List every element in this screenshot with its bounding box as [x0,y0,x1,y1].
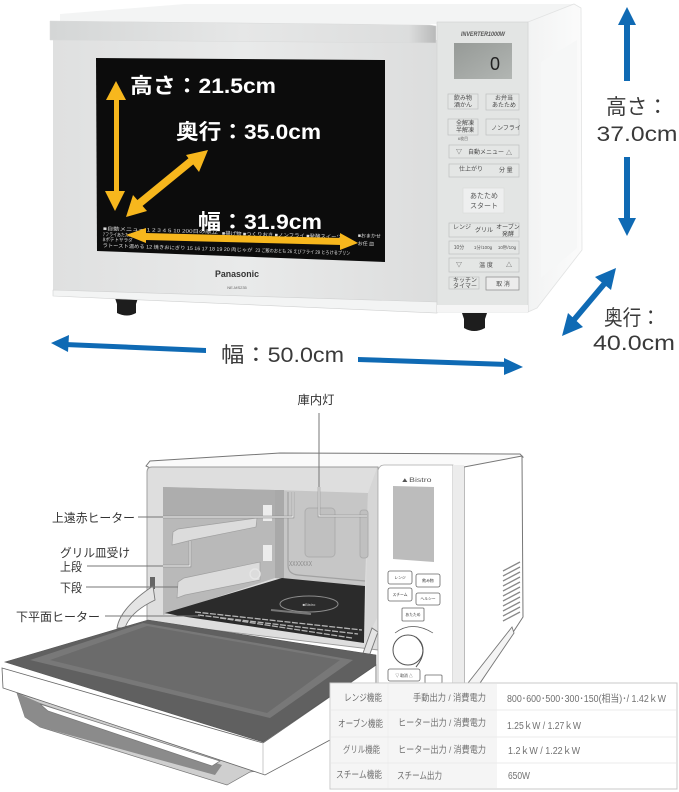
blue arrow: exterior width left [51,335,206,353]
oven floor heater [165,578,365,643]
display [393,486,434,562]
callout: grill pan rails: 上段 [60,559,82,574]
frame left notch [150,577,155,589]
interior lamp panel [289,508,368,568]
row: microwave [344,692,666,705]
yellow arrow: interior width [126,228,358,250]
microwave photo [50,4,582,331]
row: steam: スチーム機能 [336,769,382,781]
window menu text [102,224,381,258]
panel buttons: あたため [492,102,516,109]
window menu text: ラトースト温める 12 焼きおにぎり 15 16 17 18 19 20 肉じゃが [102,242,253,254]
microwave door [53,38,437,303]
yellow arrow: interior depth [126,150,208,217]
oven front frame [147,467,378,650]
panel buttons: 飲み物 [454,94,472,102]
panel buttons: スタート [470,201,498,210]
dial [393,626,433,667]
panel buttons: 半解凍 [456,126,474,134]
yellow arrow: interior height [105,81,126,211]
window menu text: 23 ご飯のおとも 26 えびフライ 29 とろけるプリン [255,247,350,257]
cavity left wall [163,487,275,615]
panel buttons: ノンフライ [491,125,521,132]
callout: grill pan rails [60,541,190,595]
blue arrow: exterior height up [618,7,636,81]
row: grill: グリル機能 [343,744,380,756]
LCD display: 0 [490,54,500,74]
panel buttons: タイマー [453,282,477,290]
buttons [388,571,442,683]
microwave feet [115,298,487,331]
callout: grill pan rails: 下段 [60,580,82,595]
panel buttons [448,94,521,290]
panel buttons: △ [506,261,512,269]
panel buttons: あたため [470,192,498,200]
panel buttons: オーブン [496,223,520,231]
door underside [17,693,263,785]
oven control panel: ▽ 取消 △ [395,673,413,678]
door inner rim [5,620,376,742]
side vents [503,562,520,621]
oven control panel: ヘルシー [420,597,436,601]
label: exterior depth [593,307,675,355]
panel buttons: 取 消 [496,280,510,288]
panel buttons: 酒かん [454,101,472,109]
door white front [2,665,376,775]
window menu text: ■おまかせ [358,232,381,240]
row: grill [343,744,580,757]
LCD display [454,43,512,79]
row: microwave: レンジ機能 [344,692,382,704]
row: microwave: 手動出力 / 消費電力 [413,692,486,704]
label: interior depth: 奥行：35.0cm [176,121,321,144]
panel buttons: 6枚目 [458,135,468,141]
open oven illustration [2,453,523,785]
interior lamp panel: XXXXXXX [289,561,312,568]
panel buttons: お弁当 [495,94,513,102]
cavity back wall [275,490,368,586]
door arms [117,586,514,683]
row: oven: オーブン機能 [338,718,383,730]
oven control panel: あたため [405,612,421,617]
label: exterior height [596,96,678,146]
panel buttons: グリル [475,226,493,234]
panel buttons: ▽ [456,262,462,269]
callout: upper heater [52,492,293,525]
panel buttons: 10分 [454,244,464,251]
panel buttons: 仕上がり [459,165,483,173]
label: interior height: 高さ：21.5cm [130,75,276,98]
row: oven: 1.25ｋW / 1.27ｋW [507,720,581,732]
blue arrow: exterior height down [618,157,636,236]
row: steam [336,769,530,782]
label: interior width: 幅：31.9cm [198,211,322,234]
cavity right wall [365,468,377,642]
panel buttons: 10秒/10g [498,244,517,251]
oven control panel: 飲み物 [422,578,434,583]
door inner surface [50,626,340,713]
callout: grill pan rails: グリル皿受け [60,546,130,560]
row: steam: 650W [508,771,530,782]
panel buttons: △ [506,149,512,157]
microwave side panel [528,4,582,312]
panel buttons: 分 量 [499,166,513,174]
panel buttons: レンジ [453,225,471,231]
racks [172,505,272,598]
window menu text: お任 皿 [358,240,374,248]
row: grill: 1.2ｋW / 1.22ｋW [508,745,580,757]
control panel [437,22,528,312]
oven control panel: レンジ [394,575,406,580]
panel buttons: 自動メニュー [468,148,504,156]
window menu text: 7フライあたため [103,232,133,239]
oven body top [146,453,523,468]
row: steam: スチーム出力 [397,770,442,782]
specification table [330,683,677,789]
oven control panel [378,465,464,683]
callout: interior light: 庫内灯 [298,393,334,407]
bistro logo: ▲Bistro [400,477,432,484]
brand logo: Panasonic [215,269,259,280]
door window [96,58,385,262]
window menu text: ■自動メニュー 1 2 3 4 5 10 200日の献立 [103,225,218,236]
label: exterior depth: 奥行： [604,307,660,330]
panel buttons: 1分/100g [474,244,493,251]
panel buttons: 温 度 [479,261,493,269]
label: exterior depth: 40.0cm [593,332,675,355]
callout: interior light [298,393,367,516]
door top band [50,21,436,43]
window menu text: ■揚げ物 ■つくりおき ■ノンフライ ■発酵スイーツ [222,230,342,241]
blue arrow: exterior depth [562,268,616,336]
panel buttons: 全解凍 [456,119,474,127]
microwave top surface [60,4,575,24]
callout: lower heater: 下平面ヒーター [16,610,100,624]
row: oven [338,717,581,732]
door bottom lip [53,290,437,313]
open oven illustration: ■Bistro [303,602,316,607]
row: oven: ヒーター出力 / 消費電力 [398,717,486,729]
inverter logo: INVERTER1000W [461,32,506,38]
panel buttons: キッチン [453,277,477,284]
model number: NE-MS235 [227,285,248,290]
label: exterior width: 幅：50.0cm [221,344,344,367]
row: grill: ヒーター出力 / 消費電力 [398,744,486,756]
panel buttons: 発酵 [502,230,514,238]
oven control panel: スチーム [392,592,408,597]
door [2,620,376,785]
panel buttons: ▽ [456,149,462,156]
door handle slot [40,704,220,766]
label: exterior height: 高さ： [606,96,668,119]
callout: upper heater: 上遠赤ヒーター [52,511,135,525]
label: exterior height: 37.0cm [596,123,678,146]
oven side [464,456,523,683]
blue arrow: exterior width right [358,357,523,375]
window menu text: 8ポテトサラダ [103,236,133,244]
